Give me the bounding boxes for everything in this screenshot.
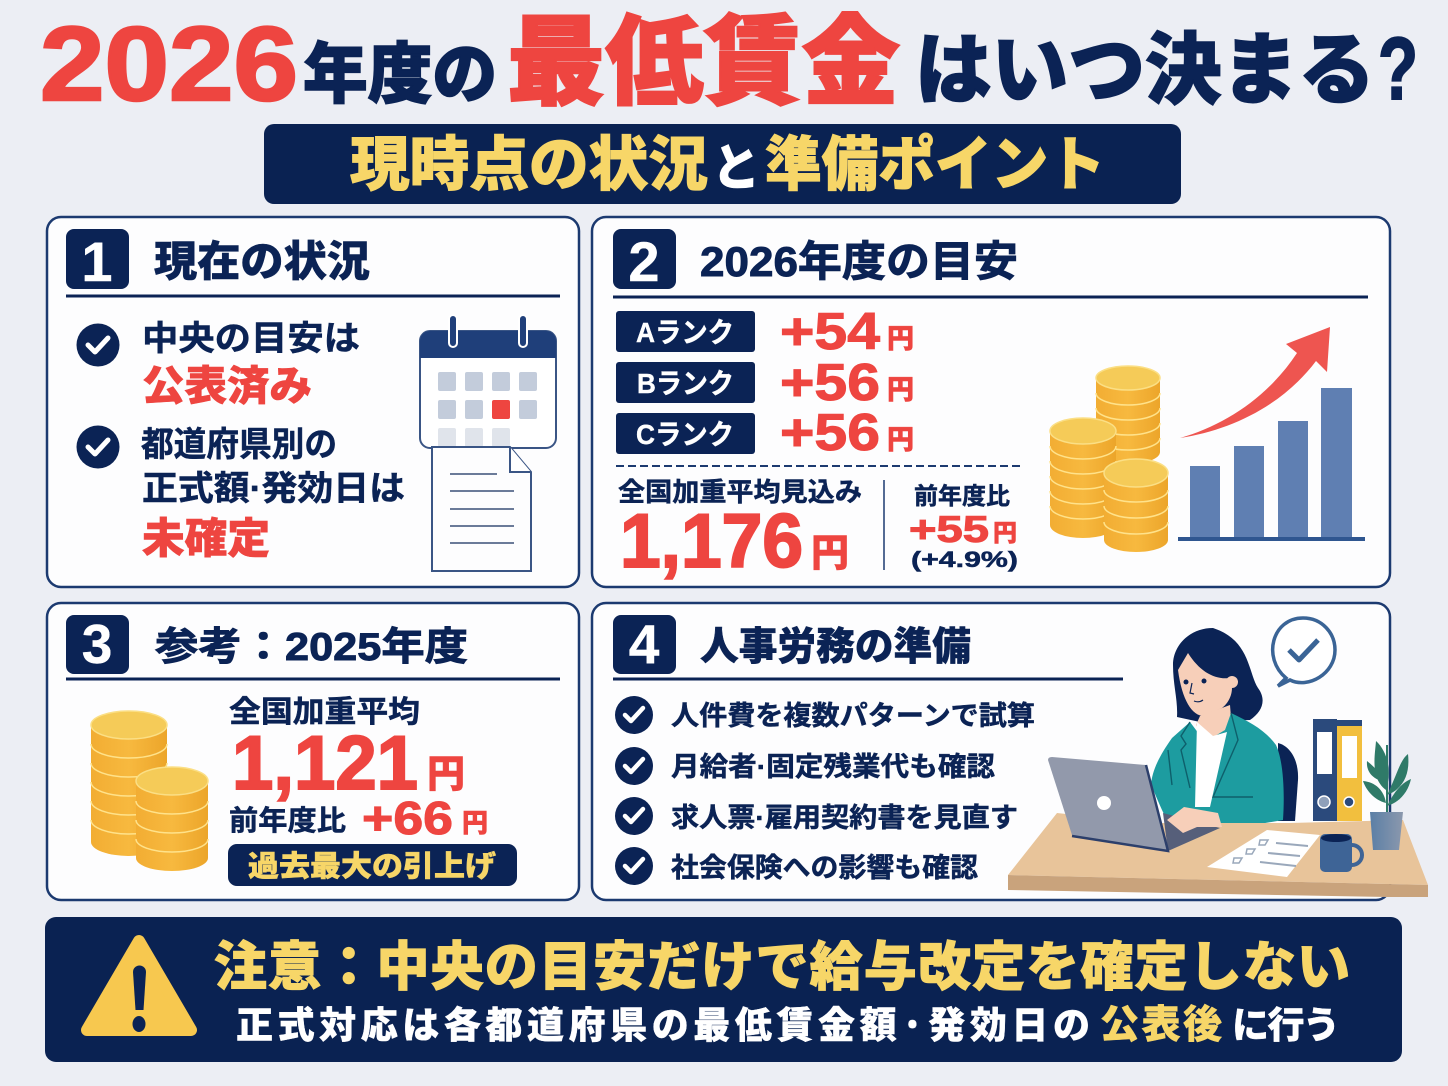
heading 2: 2026年度の目安 [700,238,1018,285]
rank A: 円 [887,317,914,356]
checklist [615,696,1035,885]
text: 都道府県別の正式額: 未確定 [142,505,270,566]
title: ? [1378,19,1418,118]
national average: 円 [811,522,849,577]
national average: 1,176 [620,499,803,584]
national average 2025: 1,121 [232,721,418,806]
checklist: 求人票·雇用契約書を見直す [671,803,1018,833]
text: 都道府県別の正式額: 正式額·発効日は [142,470,405,508]
heading 3: 参考：2025年度 [155,626,468,669]
icon: coin stacks [91,711,208,871]
shirt [1195,722,1227,807]
year on year 2025: 円 [462,803,488,840]
icon: calendar [420,315,556,448]
rank C: Cランク [636,419,734,450]
face [1178,653,1232,716]
rank A: Aランク [636,317,734,348]
badge 2 [613,229,676,293]
title: 2026 [40,6,298,123]
year on year 2025: 前年度比 [229,805,346,836]
hair [1173,628,1263,722]
national average: 全国加重平均見込み [618,477,862,507]
badge 3 [66,613,129,675]
national average 2025: 円 [427,743,465,798]
check icon 2 [76,426,120,468]
text: 中央の目安は公表済み [142,320,360,412]
rank C: +56 [780,404,880,462]
subtitle banner: 準備ポイント [765,117,1105,202]
rank C: 円 [887,418,914,457]
year on year 2025 [229,792,488,844]
jacket [1151,713,1284,832]
panel: 2026年度の目安 [592,217,1390,587]
icon: warning triangle [87,941,191,1032]
paper [1207,830,1320,877]
title [40,0,1418,125]
national average 2025 [229,696,465,806]
checklist: 社会保険への影響も確認 [671,853,978,883]
subtitle banner: と [712,128,760,200]
checklist: 人件費を複数パターンで試算 [671,701,1035,731]
badge 4: 4 [629,613,660,675]
text: 中央の目安は公表済み: 公表済み [142,352,312,412]
text: 中央の目安は公表済み: 中央の目安は [142,320,360,358]
panel: 現在の状況 [47,217,579,587]
title: 年度の [303,21,497,117]
national average [618,477,862,584]
warning body: 正式対応は各都道府県の最低賃金額·発効日の [236,995,1090,1049]
rank B: Bランク [637,368,734,399]
speech bubble [1273,618,1335,686]
year on year: 円 [993,513,1017,548]
year on year: 前年度比 [914,483,1011,509]
laptop [1048,757,1220,851]
hands [1167,807,1222,833]
rank A [616,303,914,361]
subtitle banner: 現時点の状況 [350,117,708,202]
text: 都道府県別の正式額 [141,426,405,566]
title: はいつ決まる [915,8,1375,120]
neck [1196,705,1232,745]
binders [1313,719,1362,821]
desk [1008,813,1428,897]
national average 2025: 全国加重平均 [229,696,420,729]
warning body: 公表後 [1100,994,1222,1050]
year on year [909,483,1018,572]
check icon 1 [76,324,120,366]
icon: document [432,447,531,571]
rank B: 円 [887,368,914,407]
warning heading: 注意：中央の目安だけで給与改定を確定しない [214,925,1350,1001]
year on year: (+4.9%) [911,547,1018,572]
badge 1 [66,229,129,293]
warning body: に行う [1232,995,1340,1049]
badge 3: 3 [82,613,112,675]
arrow: growth [1180,327,1330,438]
illustration: person at desk [1008,618,1428,897]
panel: 参考 2025年度 [47,603,579,900]
badge 1: 1 [81,230,113,293]
plant [1363,741,1411,850]
warning banner [45,917,1402,1062]
subtitle banner [264,117,1181,204]
rank B [616,354,914,412]
rank A: +54 [780,303,880,361]
bar chart [1178,388,1365,541]
text: 都道府県別の正式額: 都道府県別の [141,426,337,464]
badge 4 [613,613,676,675]
rank B: +56 [780,354,880,412]
rank C [616,404,914,462]
icon: coin stacks [1050,366,1168,552]
checklist: 月給者·固定残業代も確認 [671,752,995,782]
mug [1320,834,1362,872]
pill: 過去最大の引上げ: 過去最大の引上げ [248,843,496,885]
badge 2: 2 [628,230,660,293]
chair [1278,743,1298,821]
heading 1: 現在の状況 [154,228,370,289]
year on year 2025: +66 [362,792,453,844]
year on year: +55 [909,509,989,550]
panel: 人事労務の準備 [592,603,1428,900]
heading 4: 人事労務の準備 [700,616,971,672]
